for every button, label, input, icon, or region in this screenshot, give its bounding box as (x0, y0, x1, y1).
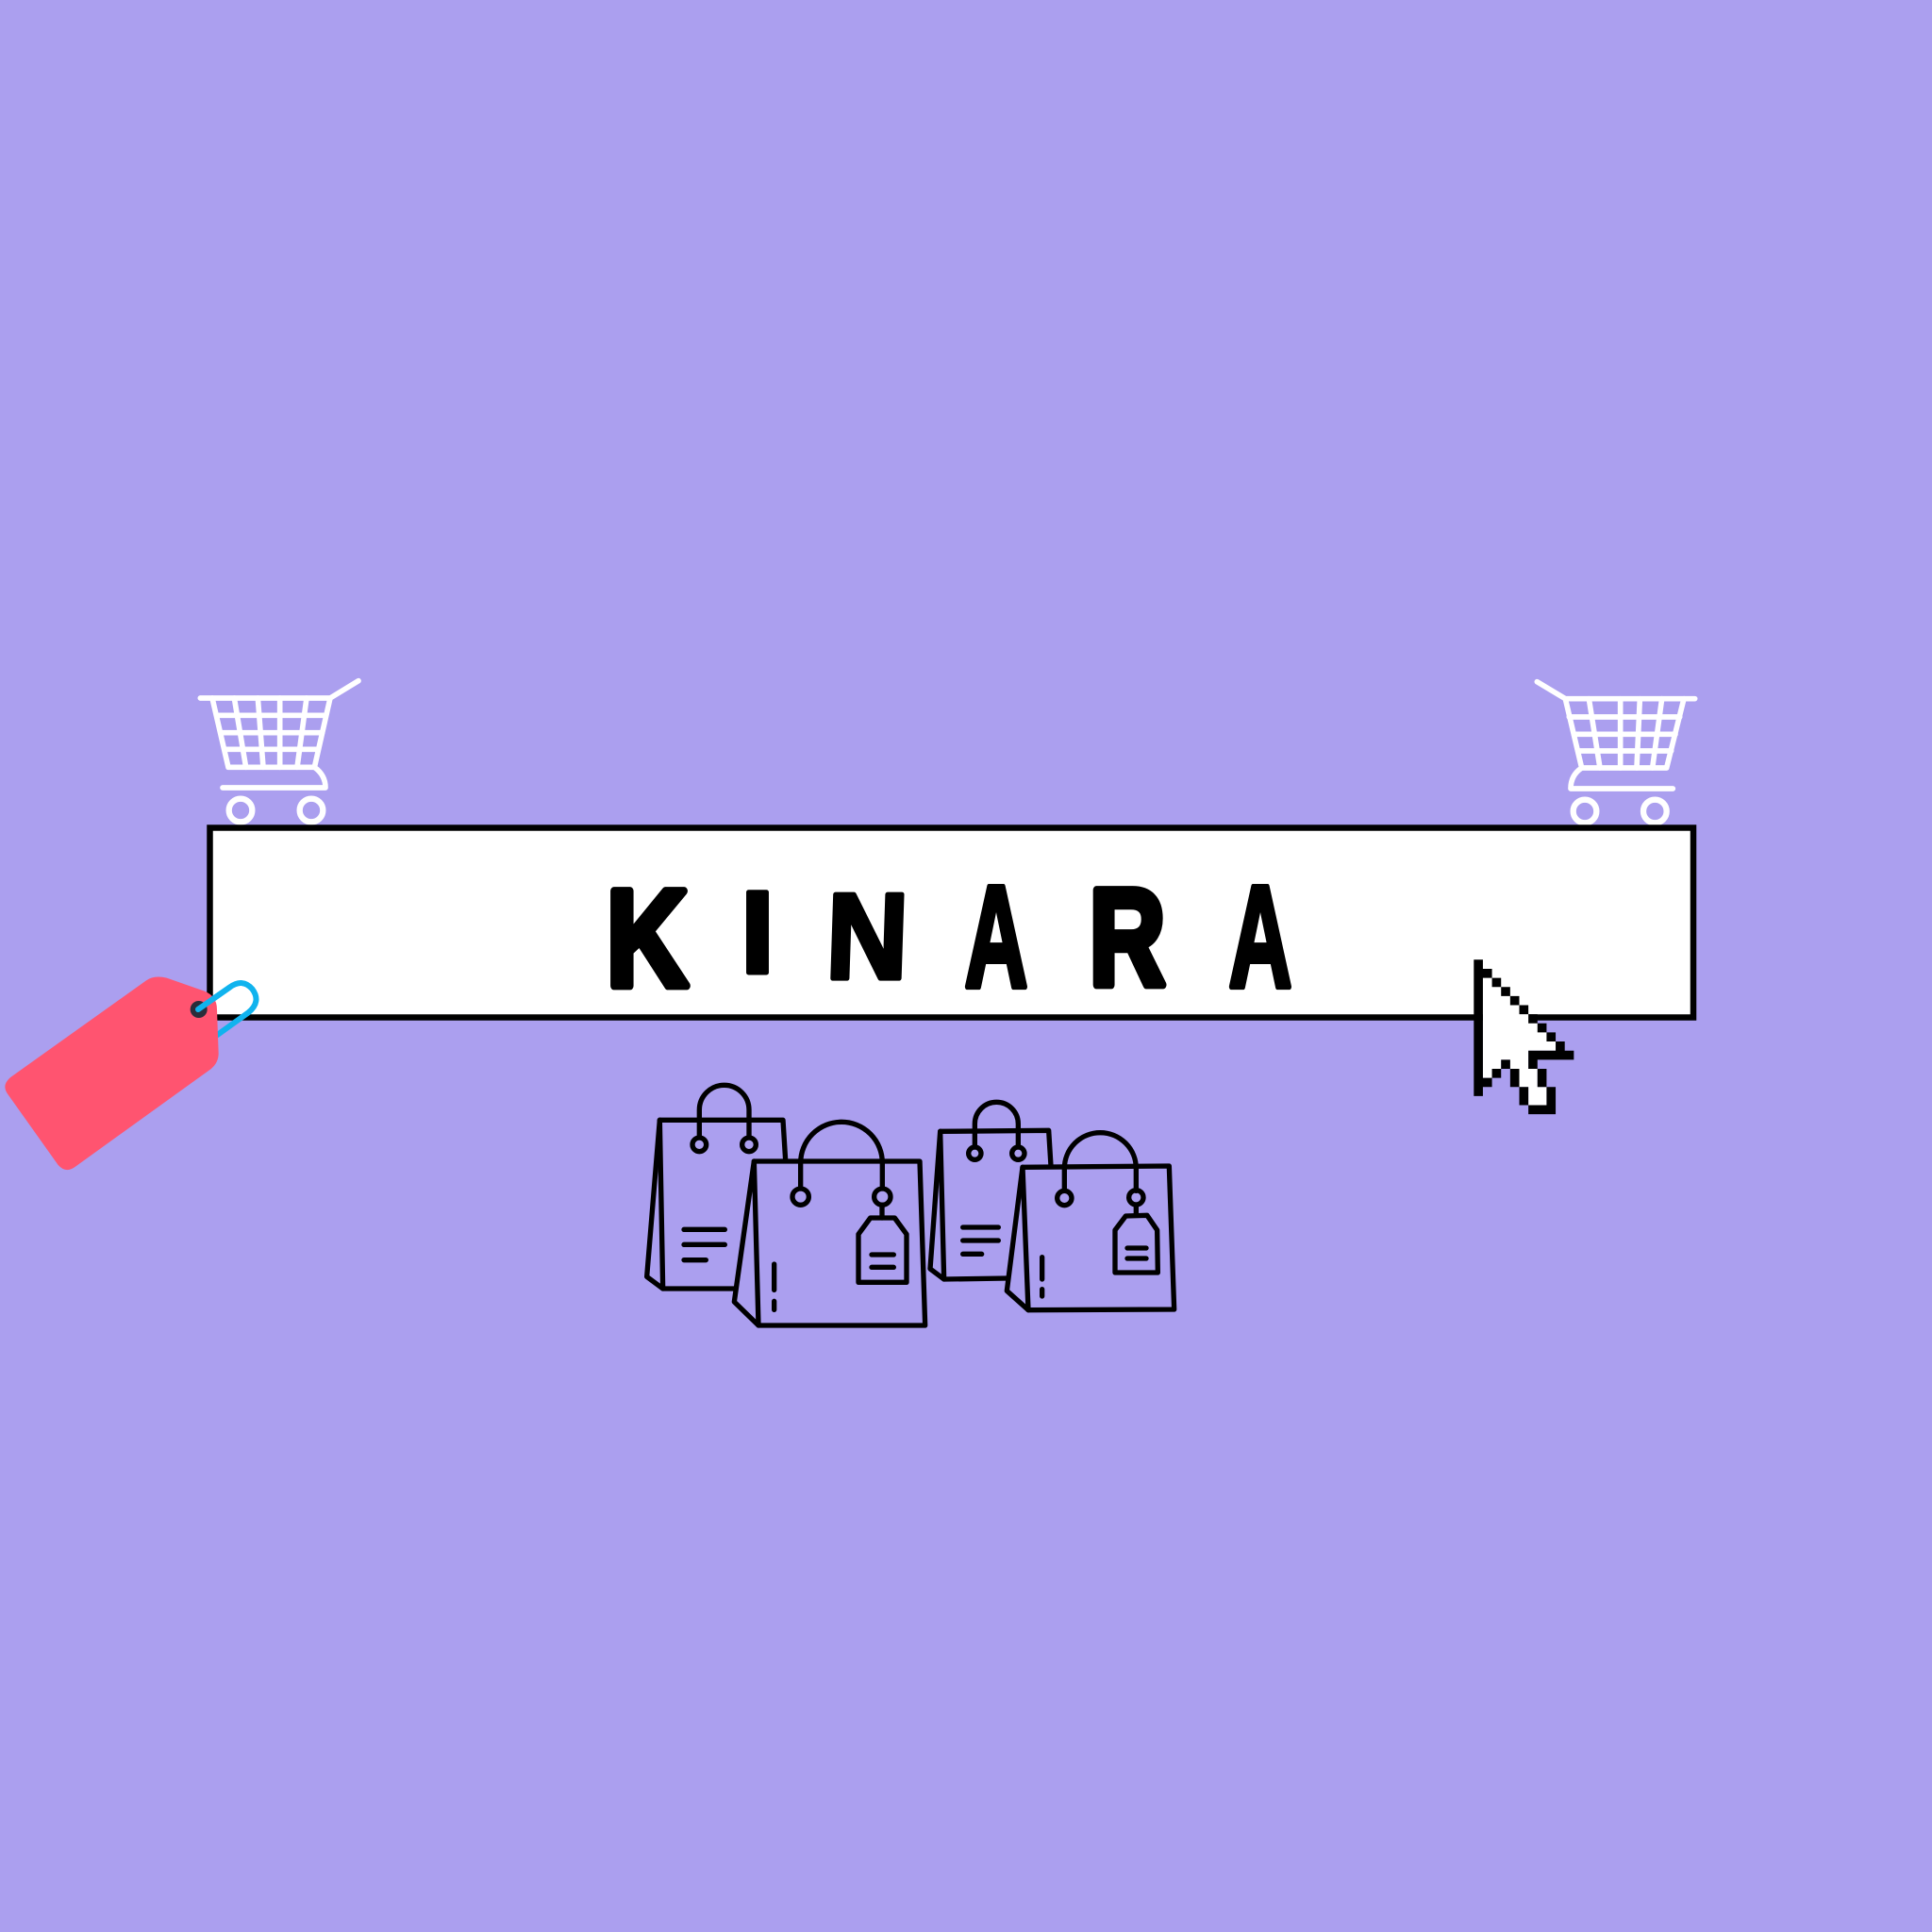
front bag (1007, 1133, 1174, 1310)
front bag (734, 1122, 925, 1325)
title: KINARA: R (1090, 860, 1165, 1014)
icon: pixel mouse cursor (1474, 959, 1574, 1114)
title: KINARA: I (741, 867, 774, 997)
title: KINARA: A (964, 856, 1028, 1018)
back bag (647, 1085, 786, 1289)
icon: left shopping cart (200, 681, 358, 822)
icon: shopping bags, right pair (930, 1102, 1174, 1310)
title: KINARA: N (824, 869, 910, 1005)
cursor outline (1474, 959, 1574, 1114)
icon: red price tag (5, 976, 256, 1170)
string front (198, 988, 229, 1009)
tag string (198, 983, 256, 1035)
icon: shopping bags, left pair (647, 1085, 925, 1325)
cursor fill (1483, 969, 1556, 1106)
title: KINARA (607, 856, 1292, 1018)
title: KINARA: K (607, 862, 688, 1016)
icon: right shopping cart (1537, 682, 1695, 823)
title banner (209, 828, 1693, 1017)
tag body (5, 976, 219, 1170)
title: KINARA: A (1228, 856, 1292, 1018)
tag hole (191, 1001, 208, 1018)
back bag (930, 1102, 1051, 1279)
